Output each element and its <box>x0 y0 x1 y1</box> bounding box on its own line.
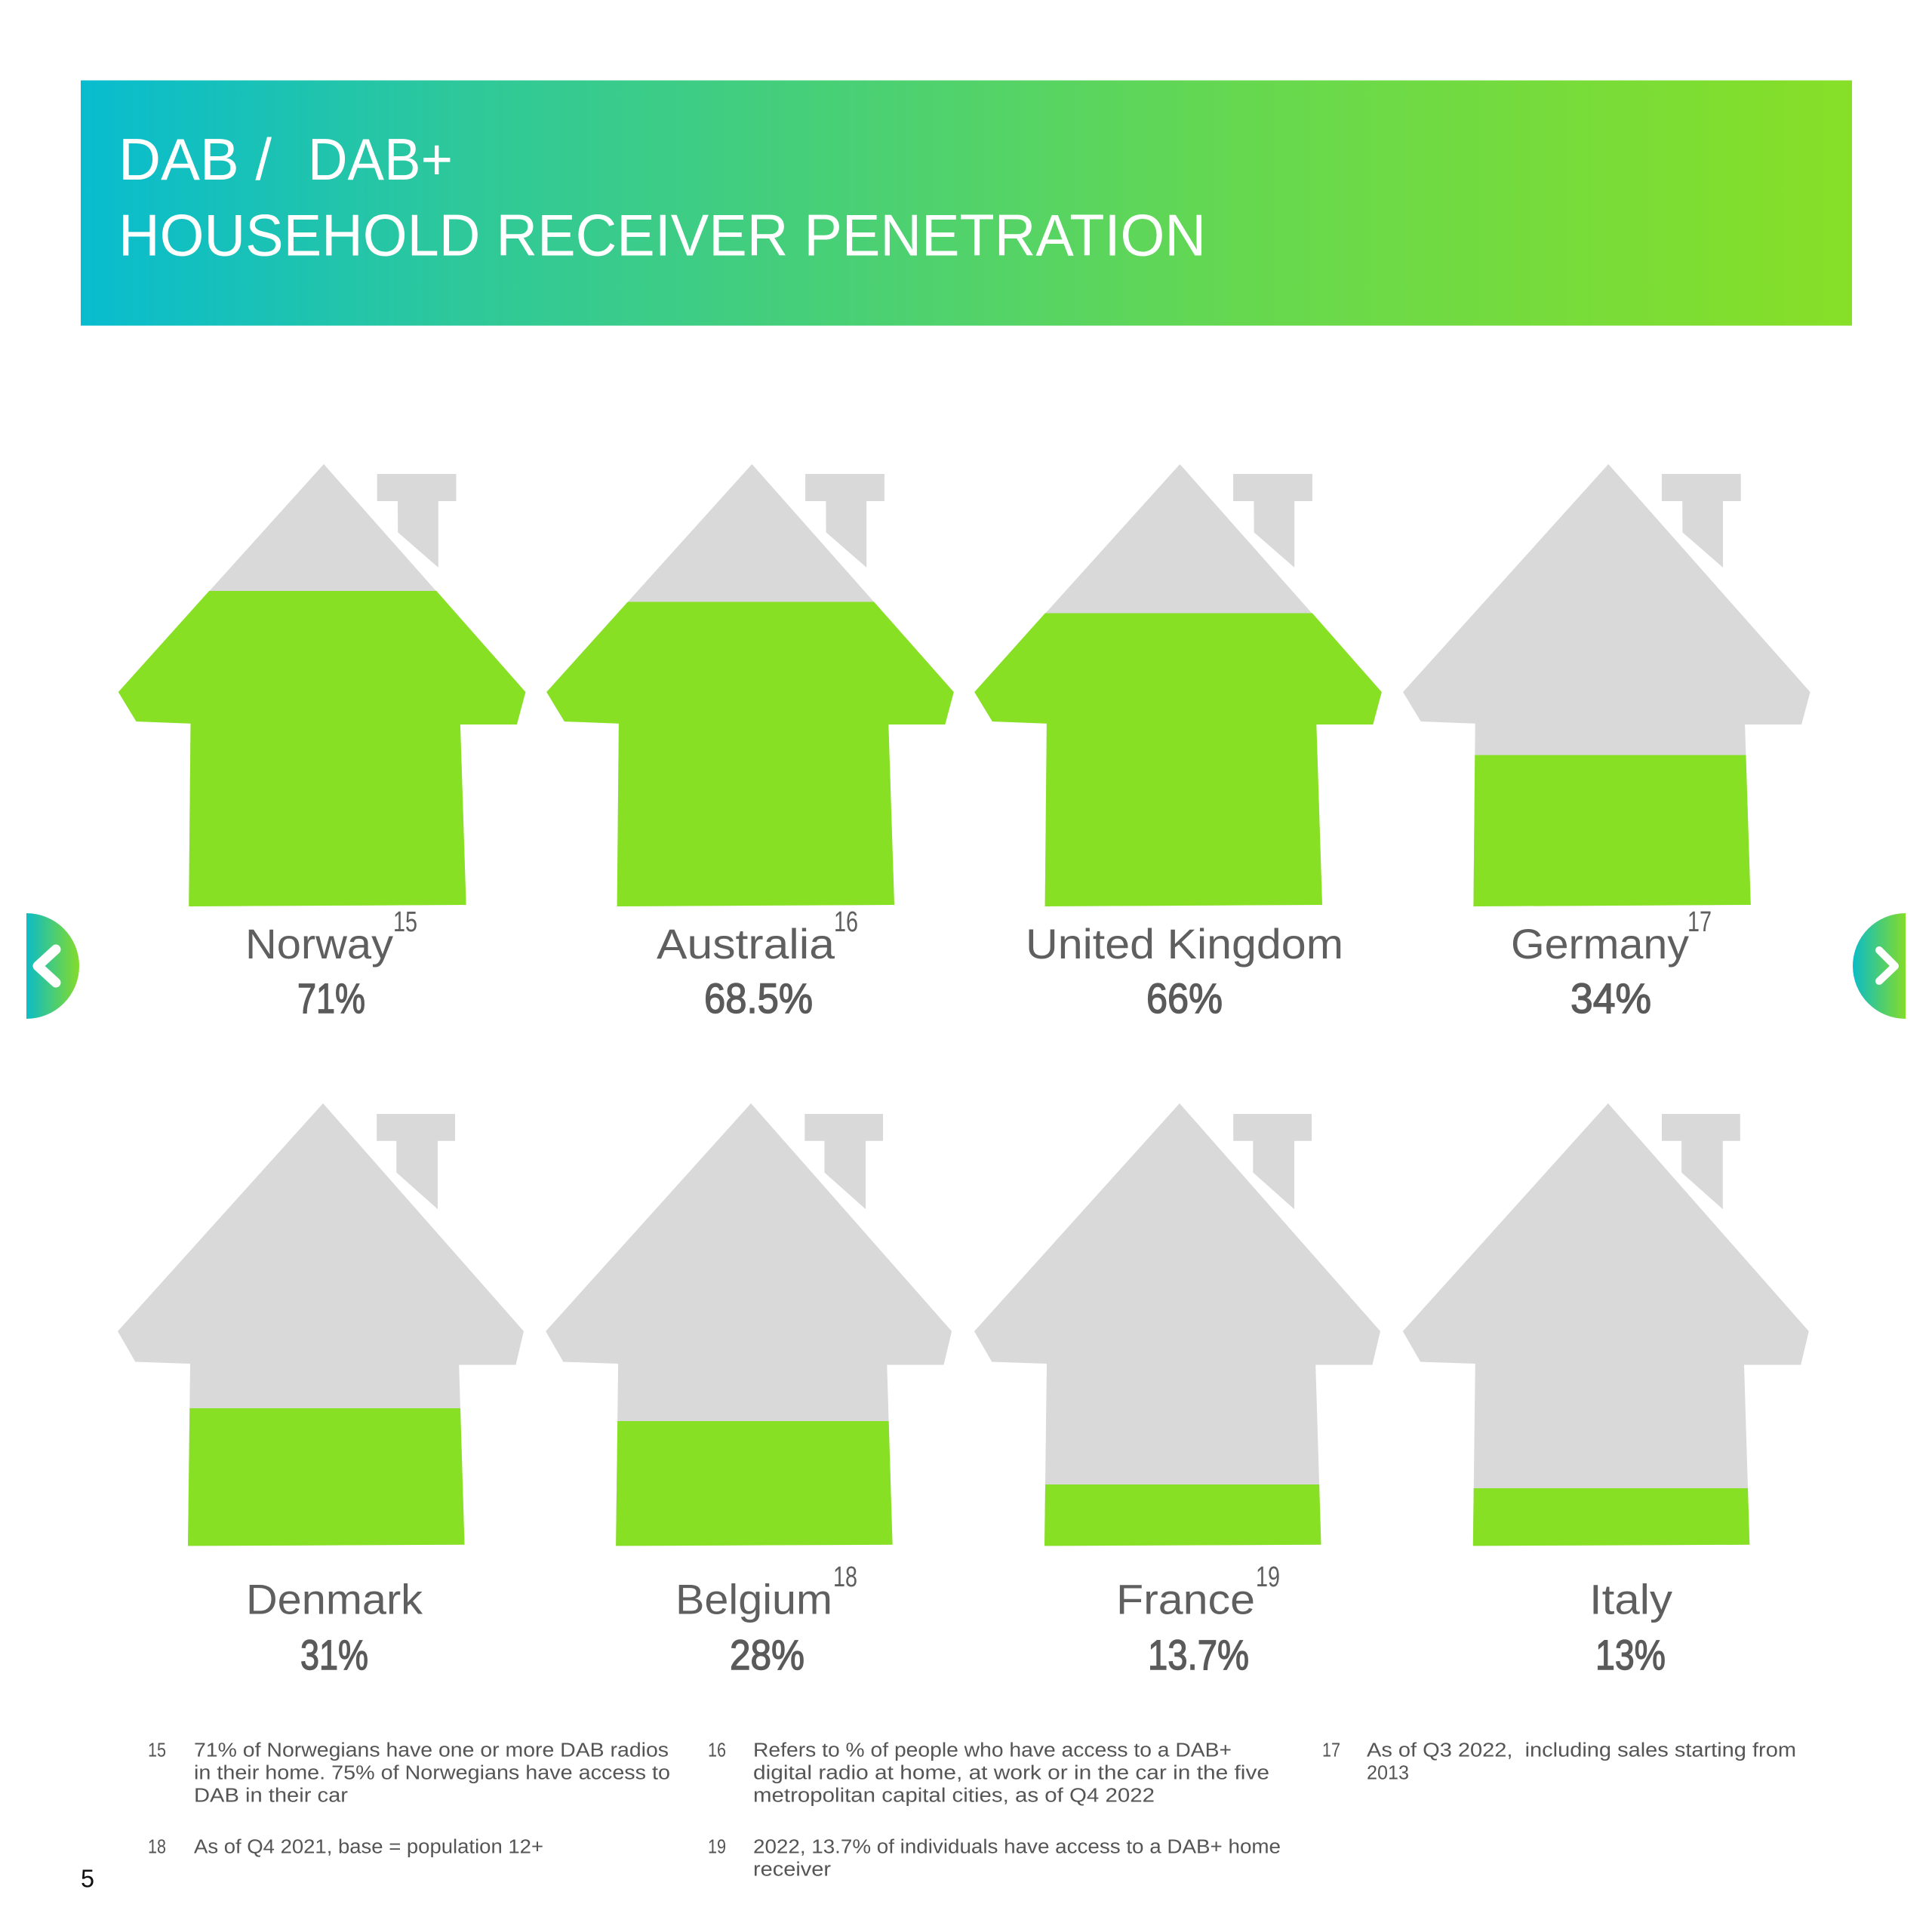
title line 2: HOUSEHOLD RECEIVER PENETRATION <box>118 202 1206 269</box>
footnote 18: 18 <box>148 1837 166 1858</box>
arrow: previous page <box>26 913 79 1019</box>
footnote 15: 15 <box>148 1740 166 1761</box>
house: United Kingdom 66% <box>974 464 1382 906</box>
footnote 18: As of Q4 2021, base = population 12+ <box>194 1837 543 1858</box>
page number: 5 <box>81 1864 94 1893</box>
footnote 19 <box>708 1837 1281 1881</box>
footnote 17: 17 <box>1322 1740 1340 1761</box>
label: France: 19 <box>1256 1561 1280 1593</box>
footnote 16: metropolitan capital cities, as of Q4 2022 <box>753 1786 1155 1807</box>
arrow: next page <box>1853 913 1906 1019</box>
label: Belgium: 28% <box>730 1631 804 1678</box>
house: Italy 13% <box>1403 1103 1809 1546</box>
label: Australia: 68.5% <box>704 974 813 1022</box>
footnote 19: 2022, 13.7% of individuals have access to a DAB+ home <box>753 1837 1281 1858</box>
footnote 19: receiver <box>753 1860 832 1881</box>
label: Denmark <box>246 1576 423 1678</box>
footnote 16: Refers to % of people who have access to a DAB+ <box>753 1740 1232 1761</box>
label: France <box>1116 1561 1280 1678</box>
house: Norway 71% <box>118 464 525 906</box>
label: Australia: 16 <box>834 906 858 938</box>
footnote 16: 16 <box>708 1740 726 1761</box>
title banner <box>81 80 1852 326</box>
label: France: France <box>1116 1576 1255 1623</box>
label: Germany: 34% <box>1571 974 1651 1022</box>
footnote 15: in their home. 75% of Norwegians have access to <box>194 1763 670 1784</box>
footnote 17: 2013 <box>1367 1763 1409 1784</box>
label: Italy: 13% <box>1595 1631 1666 1678</box>
footnote 15: DAB in their car <box>194 1786 349 1807</box>
house: Australia 68.5% <box>546 464 954 906</box>
label: Norway <box>245 906 417 1022</box>
label: Italy: Italy <box>1589 1576 1672 1623</box>
footnote 15 <box>148 1740 670 1807</box>
label: Germany <box>1511 906 1712 1022</box>
footnote 17 <box>1322 1740 1796 1784</box>
label: United Kingdom: United Kingdom <box>1026 920 1343 968</box>
footnote 16 <box>708 1740 1269 1807</box>
footnote 16: digital radio at home, at work or in the car in the five <box>753 1763 1269 1784</box>
house: Denmark 31% <box>118 1103 524 1546</box>
footnote 17: As of Q3 2022, including sales starting from <box>1367 1740 1796 1761</box>
label: Germany: Germany <box>1511 920 1689 968</box>
label: Belgium: 18 <box>833 1561 857 1593</box>
label: Norway: Norway <box>245 920 393 968</box>
house: Germany 34% <box>1403 464 1810 906</box>
house: France 13.7% <box>974 1103 1380 1546</box>
label: Australia: Australia <box>657 920 835 968</box>
house: Belgium 28% <box>546 1103 952 1546</box>
label: Norway: 71% <box>297 974 365 1022</box>
title line 1: DAB+ <box>308 126 453 192</box>
label: Denmark: 31% <box>300 1631 368 1678</box>
label: Belgium <box>675 1561 857 1678</box>
label: Italy <box>1589 1576 1672 1678</box>
title line 1 <box>118 126 453 192</box>
title line 1: DAB / <box>118 126 272 192</box>
label: Australia <box>657 906 858 1022</box>
label: United Kingdom: 66% <box>1146 974 1223 1022</box>
label: Belgium: Belgium <box>675 1576 832 1623</box>
label: United Kingdom <box>1026 920 1343 1022</box>
footnote 15: 71% of Norwegians have one or more DAB radios <box>194 1740 669 1761</box>
label: France: 13.7% <box>1148 1631 1249 1678</box>
label: Germany: 17 <box>1687 906 1712 938</box>
label: Denmark: Denmark <box>246 1576 423 1623</box>
label: Norway: 15 <box>393 906 417 938</box>
footnote 19: 19 <box>708 1837 726 1858</box>
